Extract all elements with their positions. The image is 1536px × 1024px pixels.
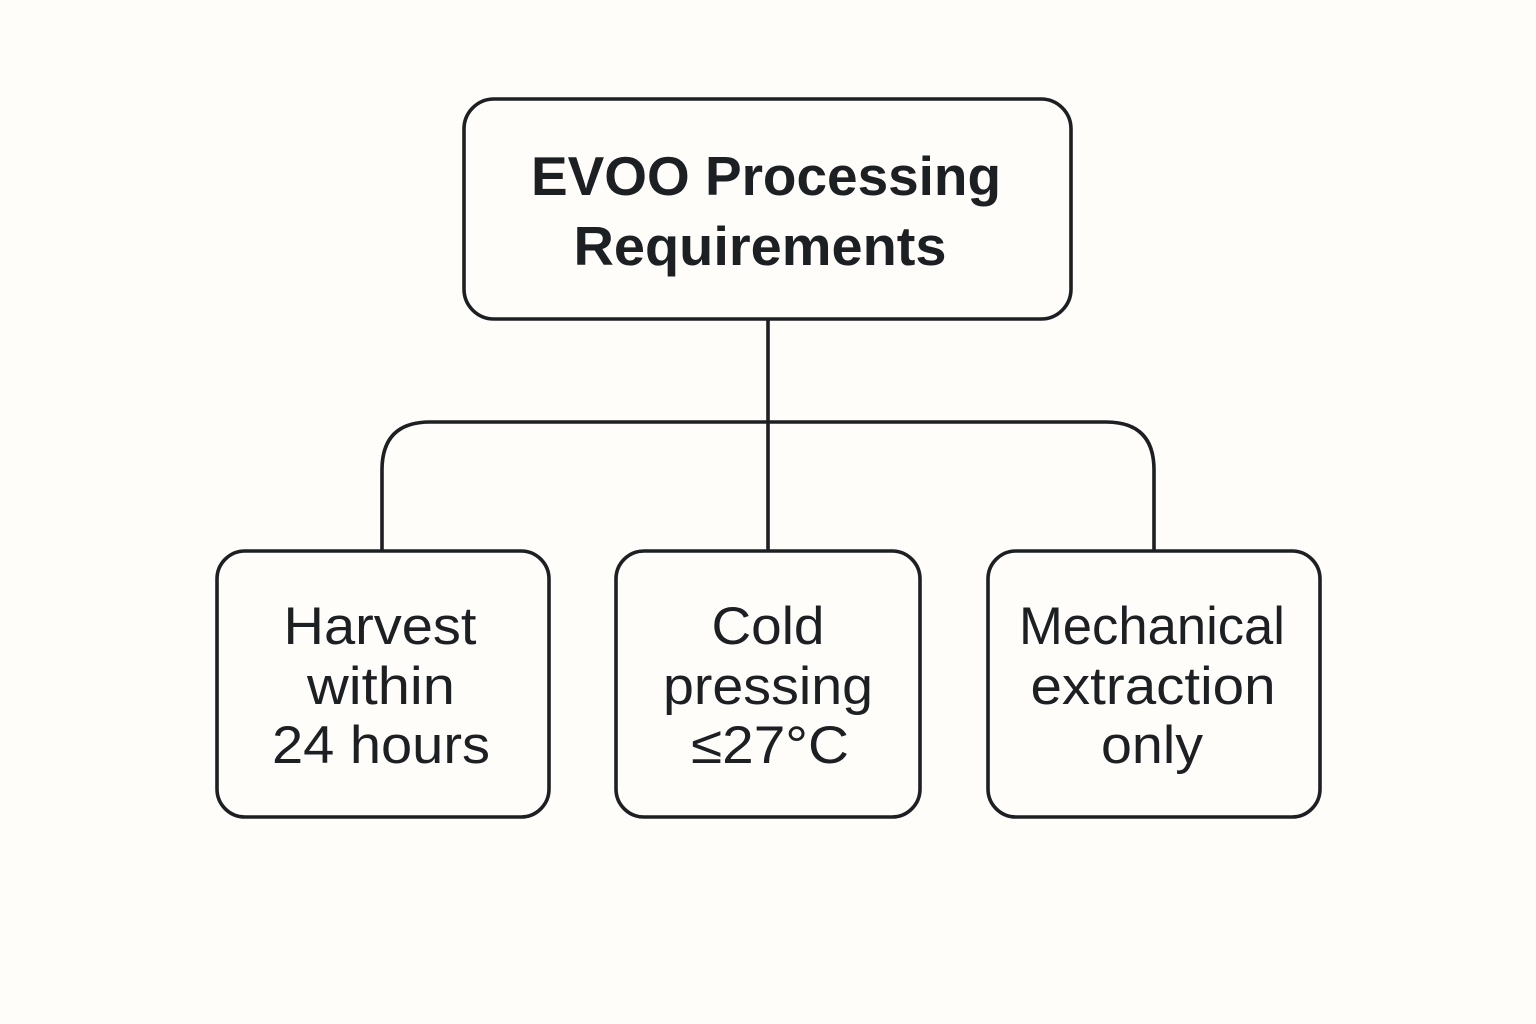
box: cold pressing: pressing bbox=[663, 657, 873, 716]
box: cold pressing: ≤27°C bbox=[691, 716, 849, 775]
box: harvest: 24 hours bbox=[272, 716, 490, 775]
connector lines bbox=[382, 319, 1154, 550]
title text: EVOO Processing bbox=[531, 145, 1001, 207]
box: harvest: within bbox=[306, 657, 455, 716]
box: mechanical extraction: extraction bbox=[1030, 657, 1276, 716]
box: mechanical extraction: Mechanical bbox=[1019, 597, 1285, 656]
box: harvest: Harvest bbox=[284, 597, 477, 656]
title text: Requirements bbox=[574, 215, 946, 277]
box: mechanical extraction: only bbox=[1101, 716, 1204, 775]
box: harvest bbox=[217, 551, 549, 817]
box: mechanical extraction bbox=[988, 551, 1320, 817]
box: cold pressing bbox=[616, 551, 920, 817]
title text bbox=[531, 145, 1001, 277]
title box bbox=[464, 99, 1071, 319]
box: cold pressing: Cold bbox=[712, 597, 824, 656]
